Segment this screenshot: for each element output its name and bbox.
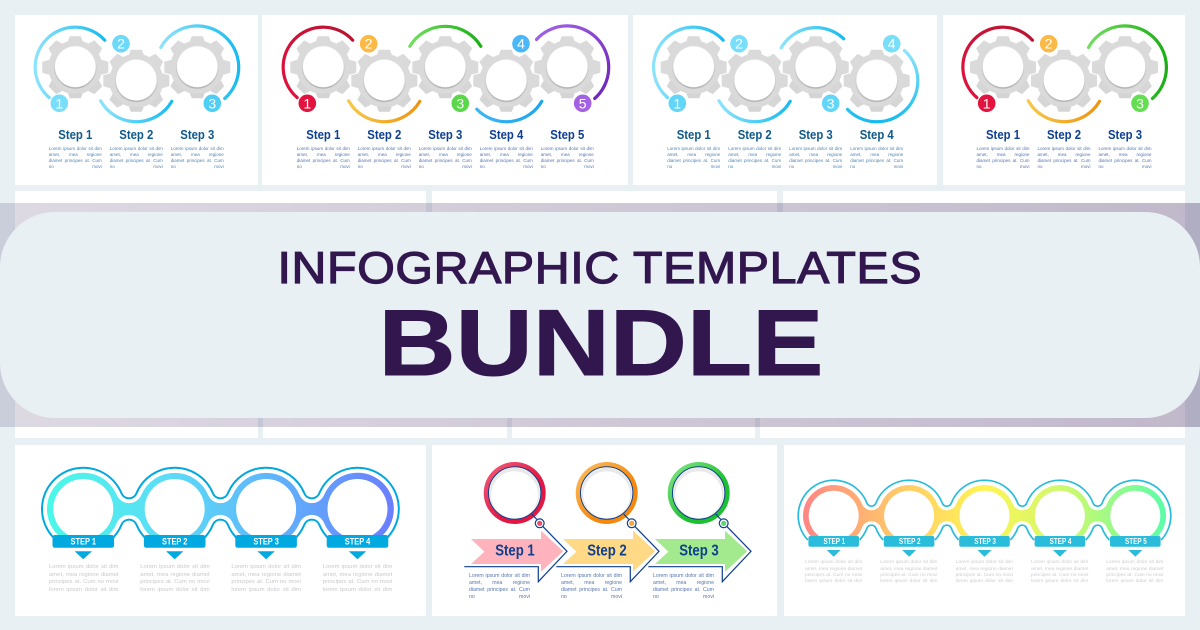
step descriptions: diamet principes at. Cum [480,158,533,163]
step descriptions: Lorem ipsum dolor sit dim [110,146,163,151]
step labels: Step 3 [1108,127,1142,142]
step labels: Step 3 [799,127,833,142]
number badges: 2 [1045,36,1053,52]
step descriptions: amet, mea regione [419,152,472,157]
step descriptions: Lorem ipsum dolor sit dim [1098,146,1152,151]
step labels: Step 3 [428,127,462,142]
step labels: Step 3 [679,543,719,560]
step labels [306,127,584,142]
number badges: 1 [303,95,311,111]
step descriptions: Lorem ipsum dolor sit dim [49,564,118,570]
step labels: Step 2 [738,127,772,142]
step descriptions: no movi [171,164,224,169]
number badges: 2 [365,36,373,52]
arcs [963,26,1166,122]
step descriptions: diamet principes at. Cum [541,158,594,163]
step descriptions: diamet principes at. Cum [653,587,714,593]
step descriptions: diamet principes at. Cum [976,158,1030,163]
step descriptions: diamet principes at. Cum [297,158,350,163]
step labels: Step 1 [58,127,92,142]
step descriptions: diamet principes at. Cum [850,158,903,163]
step tabs: STEP 4 [345,536,370,546]
step descriptions: Lorem ipsum dolor sit dim [850,146,903,151]
step descriptions: no movi [1038,164,1090,169]
step descriptions: principes at. Cum no movi [880,573,937,578]
step descriptions: principes at. Cum no movi [323,579,392,585]
step descriptions: Lorem ipsum dolor sit dim [297,146,350,151]
step descriptions: amet, mea regione diamet [880,567,937,572]
number badges [668,35,900,112]
step descriptions: diamet principes at. Cum [1098,158,1152,163]
step descriptions: principes at. Cum no movi [805,573,862,578]
step descriptions: diamet principes at. Cum [667,158,720,163]
panel: three-step multicolor gears [943,15,1185,185]
step descriptions: amet, mea regione [1038,152,1090,157]
step descriptions: no movi [789,164,842,169]
step descriptions: lorem ipsum dolor sit dim [323,587,392,593]
step descriptions: no movi [480,164,533,169]
step descriptions: diamet principes at. Cum [469,587,530,593]
step descriptions [49,146,224,172]
step descriptions: amet, mea regione [1098,152,1152,157]
step tabs: STEP 2 [162,536,187,546]
step tabs: STEP 5 [1125,537,1147,546]
step descriptions: principes at. Cum no movi [140,579,210,585]
step descriptions: diamet principes at. Cum [561,587,622,593]
number badges: 3 [827,95,835,111]
step labels: Step 4 [489,127,524,142]
step labels: Step 5 [550,127,584,142]
step descriptions: Lorem ipsum dolor sit dim [561,573,622,579]
step descriptions: amet, mea regione diamet [956,567,1013,572]
panel: four-step cyan gears [633,15,937,185]
step descriptions: Lorem ipsum dolor sit dim [805,560,862,565]
step descriptions: Lorem ipsum dolor sit dim [976,146,1030,151]
step labels: Step 4 [860,127,894,142]
step labels: Step 2 [119,127,153,142]
step descriptions: amet, mea regione diamet [140,572,210,578]
step descriptions: principes at. Cum no movi [1031,573,1088,578]
step descriptions: Lorem ipsum dolor sit dim [653,573,714,579]
step descriptions: lorem ipsum dolor sit dim [1106,579,1163,584]
step descriptions [49,564,392,596]
number badges: 4 [517,36,525,52]
step descriptions: Lorem ipsum dolor sit dim [1106,560,1163,565]
step descriptions: diamet principes at. Cum [789,158,842,163]
step descriptions: amet, mea regione diamet [49,572,118,578]
step descriptions: lorem ipsum dolor sit dim [140,587,210,593]
step labels [677,127,894,142]
step descriptions: no movi [297,164,350,169]
step descriptions: Lorem ipsum dolor sit dim [140,564,210,570]
step descriptions: amet, mea regione diamet [1106,567,1163,572]
step descriptions: amet, mea regione [297,152,350,157]
step descriptions: amet, mea regione [469,580,530,586]
step descriptions: lorem ipsum dolor sit dim [880,579,937,584]
banner shadow band [0,203,1200,427]
step descriptions: diamet principes at. Cum [419,158,472,163]
step descriptions: Lorem ipsum dolor sit dim [231,564,301,570]
step descriptions: principes at. Cum no movi [1106,573,1163,578]
ring chain [42,468,399,545]
number badges: 3 [456,95,464,111]
step descriptions: amet, mea regione [667,152,720,157]
panel: five-step connected rings [784,445,1185,616]
step tabs: STEP 3 [253,536,279,546]
number badges: 1 [55,95,63,111]
panel: five-step multicolor gears [262,15,628,185]
step descriptions: no movi [1098,164,1152,169]
step descriptions: no movi [419,164,472,169]
panel: four-step connected rings [15,445,426,616]
step descriptions: lorem ipsum dolor sit dim [49,587,118,593]
step tabs [52,535,388,559]
number badges: 1 [983,95,991,111]
number badges: 3 [208,95,216,111]
step descriptions: Lorem ipsum dolor sit dim [956,560,1013,565]
step descriptions: no movi [850,164,903,169]
gears [42,36,230,112]
gears [290,36,600,112]
step descriptions: amet, mea regione [561,580,622,586]
panel: three-step cyan gears [15,15,258,185]
step descriptions: amet, mea regione [976,152,1030,157]
step descriptions: Lorem ipsum dolor sit dim [469,573,530,579]
step descriptions: Lorem ipsum dolor sit dim [880,560,937,565]
step labels: Step 3 [180,127,214,142]
connector lines [464,514,751,582]
step descriptions: amet, mea regione [728,152,781,157]
step descriptions: Lorem ipsum dolor sit dim [1038,146,1090,151]
step descriptions: Lorem ipsum dolor sit dim [667,146,720,151]
ring chain [798,480,1171,546]
step descriptions [805,560,1164,587]
step descriptions: no movi [541,164,594,169]
gears [661,36,910,112]
number badges [978,35,1149,112]
step labels: Step 2 [587,543,627,560]
step descriptions [297,146,594,172]
step descriptions: amet, mea regione [653,580,714,586]
step descriptions: lorem ipsum dolor sit dim [805,579,862,584]
title [278,243,922,396]
step descriptions: Lorem ipsum dolor sit dim [323,564,392,570]
number badges: 4 [888,36,896,52]
step descriptions: amet, mea regione diamet [1031,567,1088,572]
step descriptions: amet, mea regione [789,152,842,157]
step descriptions: no movi [976,164,1030,169]
number badges [298,35,592,112]
step descriptions: lorem ipsum dolor sit dim [231,587,301,593]
step descriptions: amet, mea regione diamet [805,567,862,572]
hidden middle row panels behind banner [15,191,1185,438]
step descriptions: diamet principes at. Cum [171,158,224,163]
step descriptions: amet, mea regione diamet [323,572,392,578]
panel: three-step arrows with circles [432,445,777,616]
gears [970,36,1158,112]
step descriptions: Lorem ipsum dolor sit dim [358,146,411,151]
step descriptions: amet, mea regione [850,152,903,157]
step labels [986,127,1142,142]
number badges: 2 [117,36,125,52]
step tabs: STEP 2 [899,537,921,546]
title: BUNDLE [378,291,823,396]
number badges: 1 [673,95,681,111]
step descriptions: principes at. Cum no movi [231,579,301,585]
step tabs [808,536,1161,557]
step descriptions: Lorem ipsum dolor sit dim [49,146,102,151]
step descriptions: no movi [358,164,411,169]
step descriptions: no movi [728,164,781,169]
step descriptions: diamet principes at. Cum [728,158,781,163]
step labels: Step 2 [367,127,401,142]
step descriptions [976,146,1152,172]
arrows [471,531,747,572]
step descriptions: lorem ipsum dolor sit dim [956,579,1013,584]
step descriptions: no movi [667,164,720,169]
step descriptions: amet, mea regione [358,152,411,157]
step labels: Step 1 [986,127,1020,142]
step tabs: STEP 1 [71,536,96,546]
step descriptions: Lorem ipsum dolor sit dim [480,146,533,151]
connector dots [535,519,728,528]
step descriptions: diamet principes at. Cum [1038,158,1090,163]
rings [484,462,730,524]
step descriptions: principes at. Cum no movi [956,573,1013,578]
step labels [495,543,719,560]
step descriptions [667,146,903,172]
step descriptions: Lorem ipsum dolor sit dim [728,146,781,151]
step descriptions: Lorem ipsum dolor sit dim [541,146,594,151]
step descriptions: diamet principes at. Cum [358,158,411,163]
step descriptions: principes at. Cum no movi [49,579,118,585]
step descriptions: Lorem ipsum dolor sit dim [1031,560,1088,565]
number badges: 5 [579,95,587,111]
step descriptions: diamet principes at. Cum [49,158,102,163]
step descriptions [469,573,714,602]
title: INFOGRAPHIC TEMPLATES [278,243,922,293]
step descriptions: amet, mea regione [110,152,163,157]
step descriptions: amet, mea regione diamet [231,572,301,578]
step descriptions: no movi [469,594,530,600]
step labels: Step 1 [306,127,340,142]
step labels: Step 1 [677,127,711,142]
arcs [283,26,609,122]
step descriptions: Lorem ipsum dolor sit dim [789,146,842,151]
step descriptions: lorem ipsum dolor sit dim [1031,579,1088,584]
step descriptions: no movi [49,164,102,169]
step descriptions: Lorem ipsum dolor sit dim [171,146,224,151]
number badges: 3 [1136,95,1144,111]
number badges: 2 [735,36,743,52]
step descriptions: no movi [110,164,163,169]
step tabs: STEP 4 [1050,537,1072,546]
number badges [50,35,221,112]
step descriptions: amet, mea regione [171,152,224,157]
arcs [35,26,239,122]
step descriptions: Lorem ipsum dolor sit dim [419,146,472,151]
banner pill [0,212,1200,418]
step descriptions: amet, mea regione [541,152,594,157]
step labels: Step 2 [1047,127,1081,142]
step descriptions: no movi [653,594,714,600]
step descriptions: diamet principes at. Cum [110,158,163,163]
arcs [654,27,918,122]
step descriptions: amet, mea regione [480,152,533,157]
step descriptions: amet, mea regione [49,152,102,157]
step descriptions: no movi [561,594,622,600]
step labels [58,127,214,142]
step tabs: STEP 3 [974,537,996,546]
step tabs: STEP 1 [823,537,846,546]
step labels: Step 1 [495,543,535,560]
